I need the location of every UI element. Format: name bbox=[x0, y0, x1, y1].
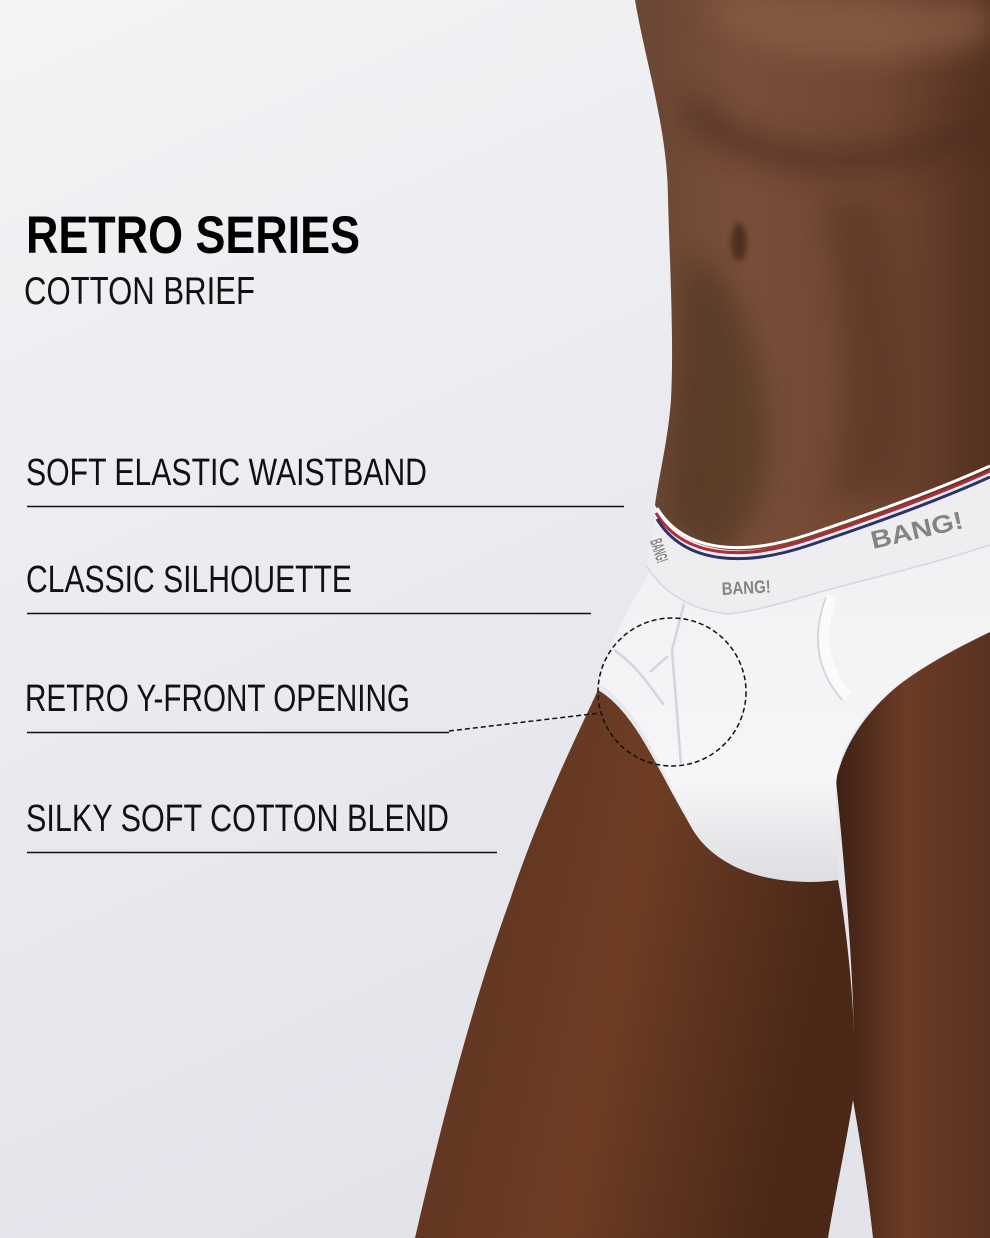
brief body bbox=[598, 530, 990, 882]
front leg bbox=[415, 690, 855, 1238]
waistband bbox=[646, 470, 990, 614]
waistband logo side: BANG! bbox=[868, 506, 966, 555]
navel bbox=[731, 223, 747, 261]
callout: dashed leader and detail circle bbox=[449, 618, 746, 766]
waistband logo front: BANG! bbox=[721, 576, 771, 599]
waistband lower edge bbox=[646, 545, 990, 614]
leg opening seam bbox=[824, 596, 848, 696]
feature label: RETRO Y-FRONT OPENING bbox=[25, 678, 410, 720]
figure illustration bbox=[415, 0, 990, 1238]
figure illustration: BANG! bbox=[646, 536, 672, 565]
torso bbox=[635, 0, 990, 570]
title: RETRO SERIES bbox=[26, 206, 360, 265]
waistband stripes bbox=[656, 466, 990, 559]
feature label: SOFT ELASTIC WAISTBAND bbox=[26, 452, 427, 494]
subtitle: COTTON BRIEF bbox=[24, 270, 255, 313]
feature label: SILKY SOFT COTTON BLEND bbox=[26, 798, 449, 840]
feature label: CLASSIC SILHOUETTE bbox=[26, 559, 352, 601]
y-front opening seam bbox=[614, 604, 684, 764]
torso shading bbox=[668, 0, 990, 560]
back leg bbox=[836, 632, 990, 1238]
